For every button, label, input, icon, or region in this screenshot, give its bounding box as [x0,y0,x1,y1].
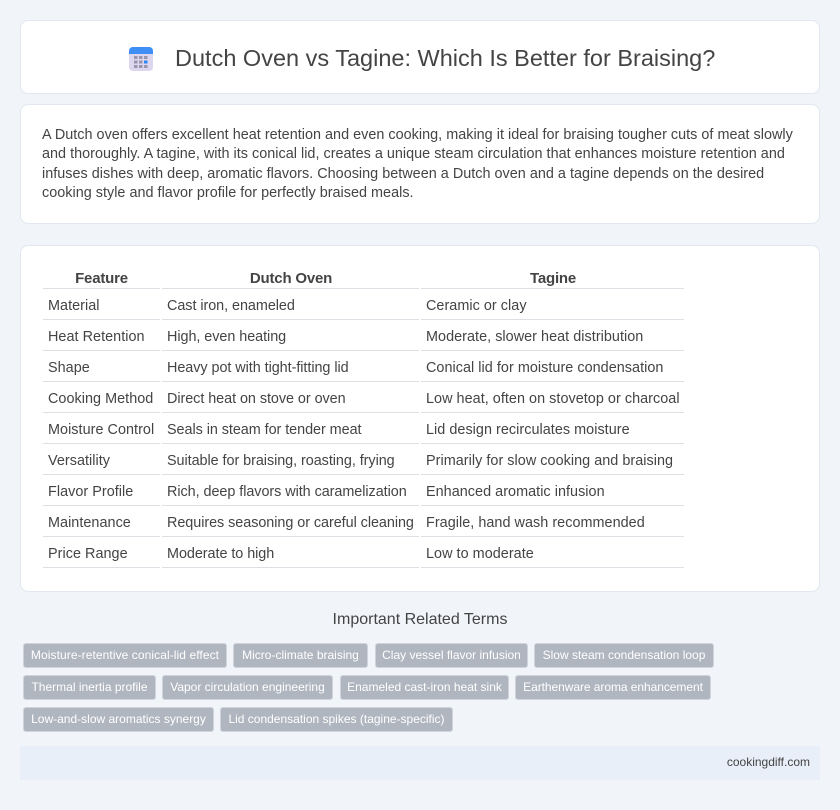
comparison table: Requires seasoning or careful cleaning [167,515,414,531]
related terms tags: Earthenware aroma enhancement [523,680,703,694]
comparison table: Primarily for slow cooking and braising [426,453,673,469]
comparison table: Low heat, often on stovetop or charcoal [426,391,680,407]
intro text: and thoroughly. A tagine, with its conical lid, creates a unique steam circulation that enhances moisture retention and [42,146,785,162]
comparison table panel [20,245,820,592]
comparison table: Moisture Control [48,422,154,438]
comparison table: Direct heat on stove or oven [167,391,346,407]
comparison table: Lid design recirculates moisture [426,422,630,438]
intro text [42,127,793,201]
intro text: infuses dishes with deep, aromatic flavors. Choosing between a Dutch oven and a tagine depends on the desired [42,166,764,182]
comparison table: Material [48,298,100,314]
intro text: cooking style and flavor profile for perfectly braised meals. [42,185,414,201]
comparison table: Low to moderate [426,546,534,562]
comparison table: Moderate to high [167,546,274,562]
footer bar [20,746,820,780]
table header: Dutch Oven [250,270,332,287]
related terms tags [23,643,714,732]
comparison table: Cast iron, enameled [167,298,295,314]
header panel [20,20,820,94]
intro text: A Dutch oven offers excellent heat retention and even cooking, making it ideal for braising tougher cuts of meat slowly [42,127,793,143]
comparison table: High, even heating [167,329,286,345]
comparison table: Moderate, slower heat distribution [426,329,643,345]
related terms tags: Enameled cast-iron heat sink [347,680,502,694]
related terms tags: Clay vessel flavor infusion [382,648,521,662]
comparison table: Conical lid for moisture condensation [426,360,663,376]
title: Dutch Oven vs Tagine: Which Is Better for Braising? [175,45,715,71]
comparison table: Rich, deep flavors with caramelization [167,484,407,500]
icon: calendar [129,47,153,71]
related terms tags: Low-and-slow aromatics synergy [31,712,206,726]
comparison table: Suitable for braising, roasting, frying [167,453,395,469]
comparison table [43,270,684,568]
related terms tags: Slow steam condensation loop [543,648,705,662]
comparison table: Ceramic or clay [426,298,527,314]
comparison table: Cooking Method [48,391,153,407]
comparison table: Heavy pot with tight-fitting lid [167,360,349,376]
comparison table: Shape [48,360,90,376]
comparison table: Heat Retention [48,329,145,345]
related terms tags: Vapor circulation engineering [170,680,325,694]
related terms tags: Lid condensation spikes (tagine-specific) [228,712,445,726]
footer source text: cookingdiff.com [727,755,810,769]
comparison table: Fragile, hand wash recommended [426,515,645,531]
comparison table: Enhanced aromatic infusion [426,484,605,500]
related terms heading: Important Related Terms [333,611,507,628]
comparison table: Price Range [48,546,128,562]
table header: Feature [75,270,128,287]
intro panel [20,104,820,224]
table header [75,270,576,287]
comparison table: Flavor Profile [48,484,133,500]
comparison table: Versatility [48,453,110,469]
related terms tags: Micro-climate braising [242,648,359,662]
comparison table: Seals in steam for tender meat [167,422,361,438]
related terms tags: Moisture-retentive conical-lid effect [31,648,219,662]
comparison table: Maintenance [48,515,131,531]
table header: Tagine [530,270,576,287]
related terms tags: Thermal inertia profile [31,680,148,694]
